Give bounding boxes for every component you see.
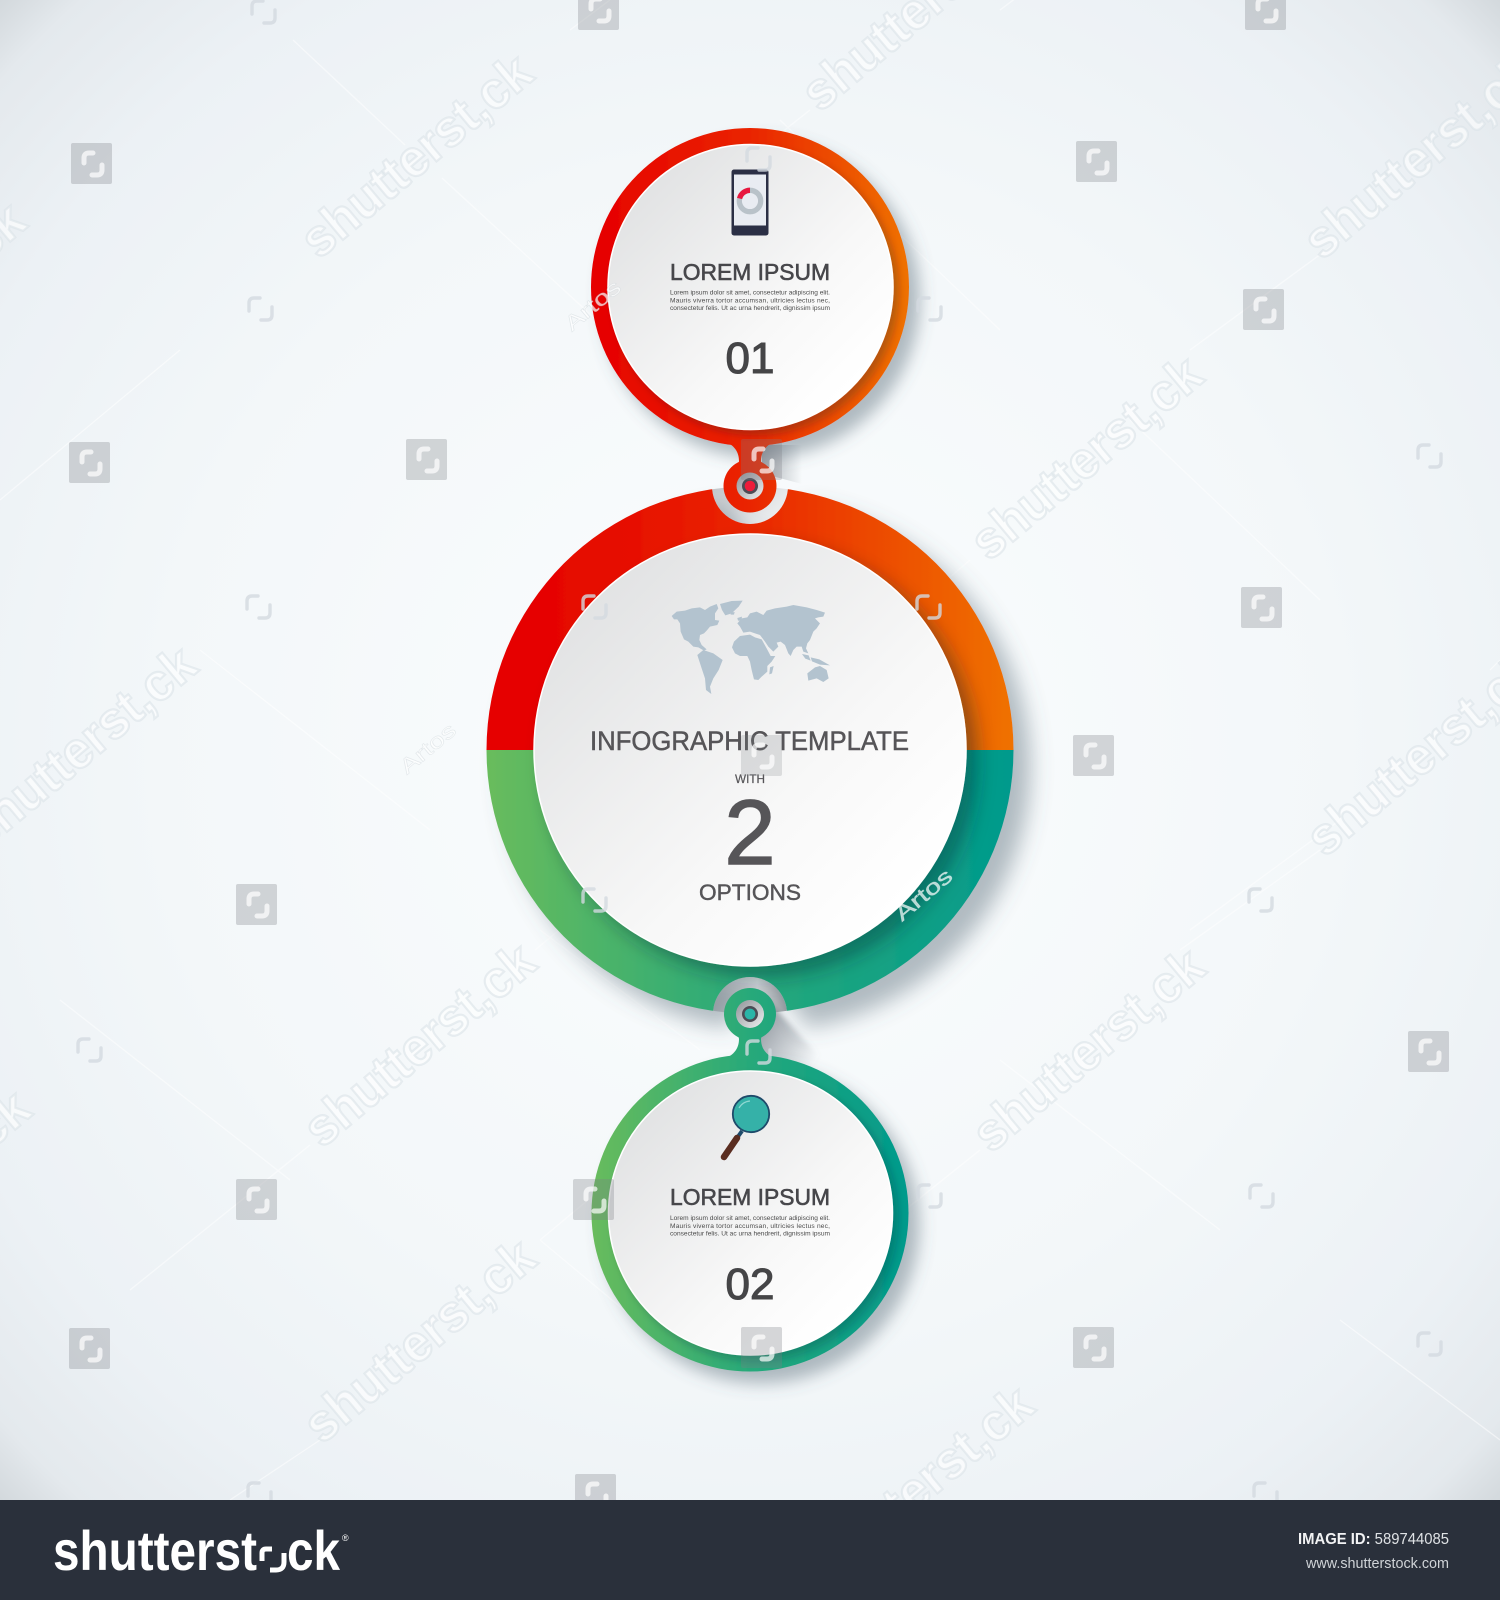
icon: smartphone <box>732 170 768 236</box>
label: options: OPTIONS <box>699 880 801 905</box>
watermark: shutterstock text: shutterst,ck <box>289 43 544 269</box>
ring 01 <box>591 128 909 446</box>
watermark: shutterstock text: shutterst,ck <box>959 345 1214 571</box>
body text 01: Lorem ipsum dolor sit amet, consectetur adipiscing elit. <box>670 290 830 296</box>
watermark: shutterstock text: shutterst,ck <box>292 932 547 1158</box>
body text 01: Mauris viverra tortor accumsan, ultricies lectus nec, <box>670 297 830 304</box>
shutterstock logo: ck <box>287 1519 341 1582</box>
watermark: shutterstock text: shutterst,ck <box>292 1228 547 1454</box>
watermark: artos credit <box>395 276 957 926</box>
heading 02: LOREM IPSUM <box>670 1184 830 1210</box>
footer band <box>0 1500 1500 1600</box>
shutterstock logo: shutterst <box>53 1519 257 1582</box>
panel: option 02 <box>592 988 908 1372</box>
watermark: artos credit: Artos <box>560 276 626 336</box>
body text 02: Mauris viverra tortor accumsan, ultricies lectus nec, <box>670 1223 830 1230</box>
number 02: 02 <box>726 1260 774 1309</box>
image id: IMAGE ID: 589744085 <box>1298 1531 1449 1548</box>
number 01: 01 <box>726 334 774 383</box>
world map <box>672 601 830 694</box>
label: with: WITH <box>735 773 765 786</box>
watermark: artos credit: Artos <box>890 865 957 926</box>
ring bottom half <box>486 750 1014 1014</box>
big ring <box>486 487 1014 1014</box>
connector pin 01 <box>724 441 776 512</box>
connector notches and long shadows <box>712 445 814 1064</box>
body text 02: consectetur felis. Ut ac urna hendrerit, dignissim ipsum <box>670 1231 831 1238</box>
shutterstock logo: ® <box>342 1533 349 1543</box>
watermark: artos credit: Artos <box>395 719 461 779</box>
disc 01 <box>608 144 893 430</box>
big number 2: 2 <box>724 782 776 884</box>
disc 02 <box>608 1071 892 1355</box>
ring 02 <box>592 1054 908 1372</box>
connector pin 02 <box>724 988 776 1059</box>
website: www.shutterstock.com <box>1305 1555 1449 1572</box>
ring top half <box>486 487 1014 750</box>
watermark: shutterstock text: shutterst,ck <box>790 1375 1045 1600</box>
heading 01: LOREM IPSUM <box>670 259 830 285</box>
body text 01: consectetur felis. Ut ac urna hendrerit, dignissim ipsum <box>670 305 831 312</box>
big centre panel <box>534 534 966 966</box>
body text 02: Lorem ipsum dolor sit amet, consectetur adipiscing elit. <box>670 1215 830 1222</box>
title: infographic template: INFOGRAPHIC TEMPLATE <box>590 726 909 756</box>
body text 02 <box>670 1215 831 1238</box>
big disc <box>534 534 966 966</box>
panel: option 01 <box>591 128 909 512</box>
body text 01 <box>670 290 831 312</box>
icon: magnifying glass <box>724 1096 769 1157</box>
watermark: shutterstock text: shutterst,ck <box>961 937 1216 1163</box>
